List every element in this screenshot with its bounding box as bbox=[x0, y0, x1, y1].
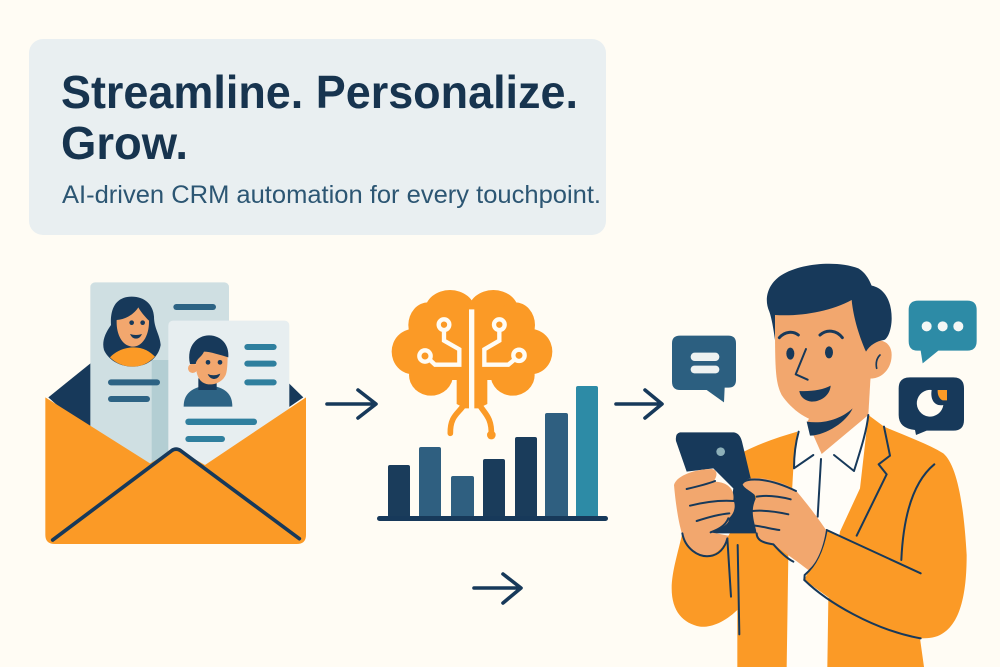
neck bbox=[807, 375, 871, 454]
title: Grow. bbox=[61, 117, 188, 169]
hair bbox=[767, 264, 892, 352]
face details bbox=[779, 331, 853, 436]
envelope back flap bbox=[48, 358, 303, 470]
ear bbox=[868, 341, 892, 379]
header panel bbox=[29, 39, 606, 235]
bar chart bbox=[377, 386, 608, 521]
chat bubble: typing dots bbox=[909, 301, 977, 363]
arrow: chart to chat bbox=[616, 390, 662, 418]
circuit traces bbox=[419, 309, 525, 413]
collar and lapel lines bbox=[727, 415, 934, 638]
woman avatar bbox=[103, 297, 161, 367]
illustration: envelope with contact cards bbox=[45, 282, 306, 544]
phone bbox=[676, 432, 759, 533]
shirt bbox=[787, 415, 868, 667]
title bbox=[61, 66, 578, 169]
right hand bbox=[742, 478, 826, 570]
envelope front flap outline bbox=[53, 449, 299, 540]
contact card: man bbox=[168, 321, 289, 481]
jacket bbox=[672, 415, 967, 667]
illustration: AI brain bbox=[392, 290, 552, 439]
chat bubble: pie chart bbox=[899, 377, 964, 435]
contact card: woman bbox=[90, 282, 229, 482]
chat bubble: message lines bbox=[672, 336, 736, 402]
face bbox=[775, 300, 871, 423]
man avatar bbox=[184, 335, 232, 407]
illustration: man using phone bbox=[672, 264, 967, 667]
title: Streamline. Personalize. bbox=[61, 66, 578, 118]
envelope front bbox=[45, 397, 306, 544]
brain lobes bbox=[392, 290, 552, 408]
brain stem legs bbox=[450, 404, 491, 435]
arrow: lower bbox=[474, 574, 521, 603]
arrow: envelope to brain bbox=[327, 390, 376, 418]
subtitle: AI-driven CRM automation for every touchpoint. bbox=[62, 181, 601, 209]
left hand bbox=[674, 469, 735, 556]
